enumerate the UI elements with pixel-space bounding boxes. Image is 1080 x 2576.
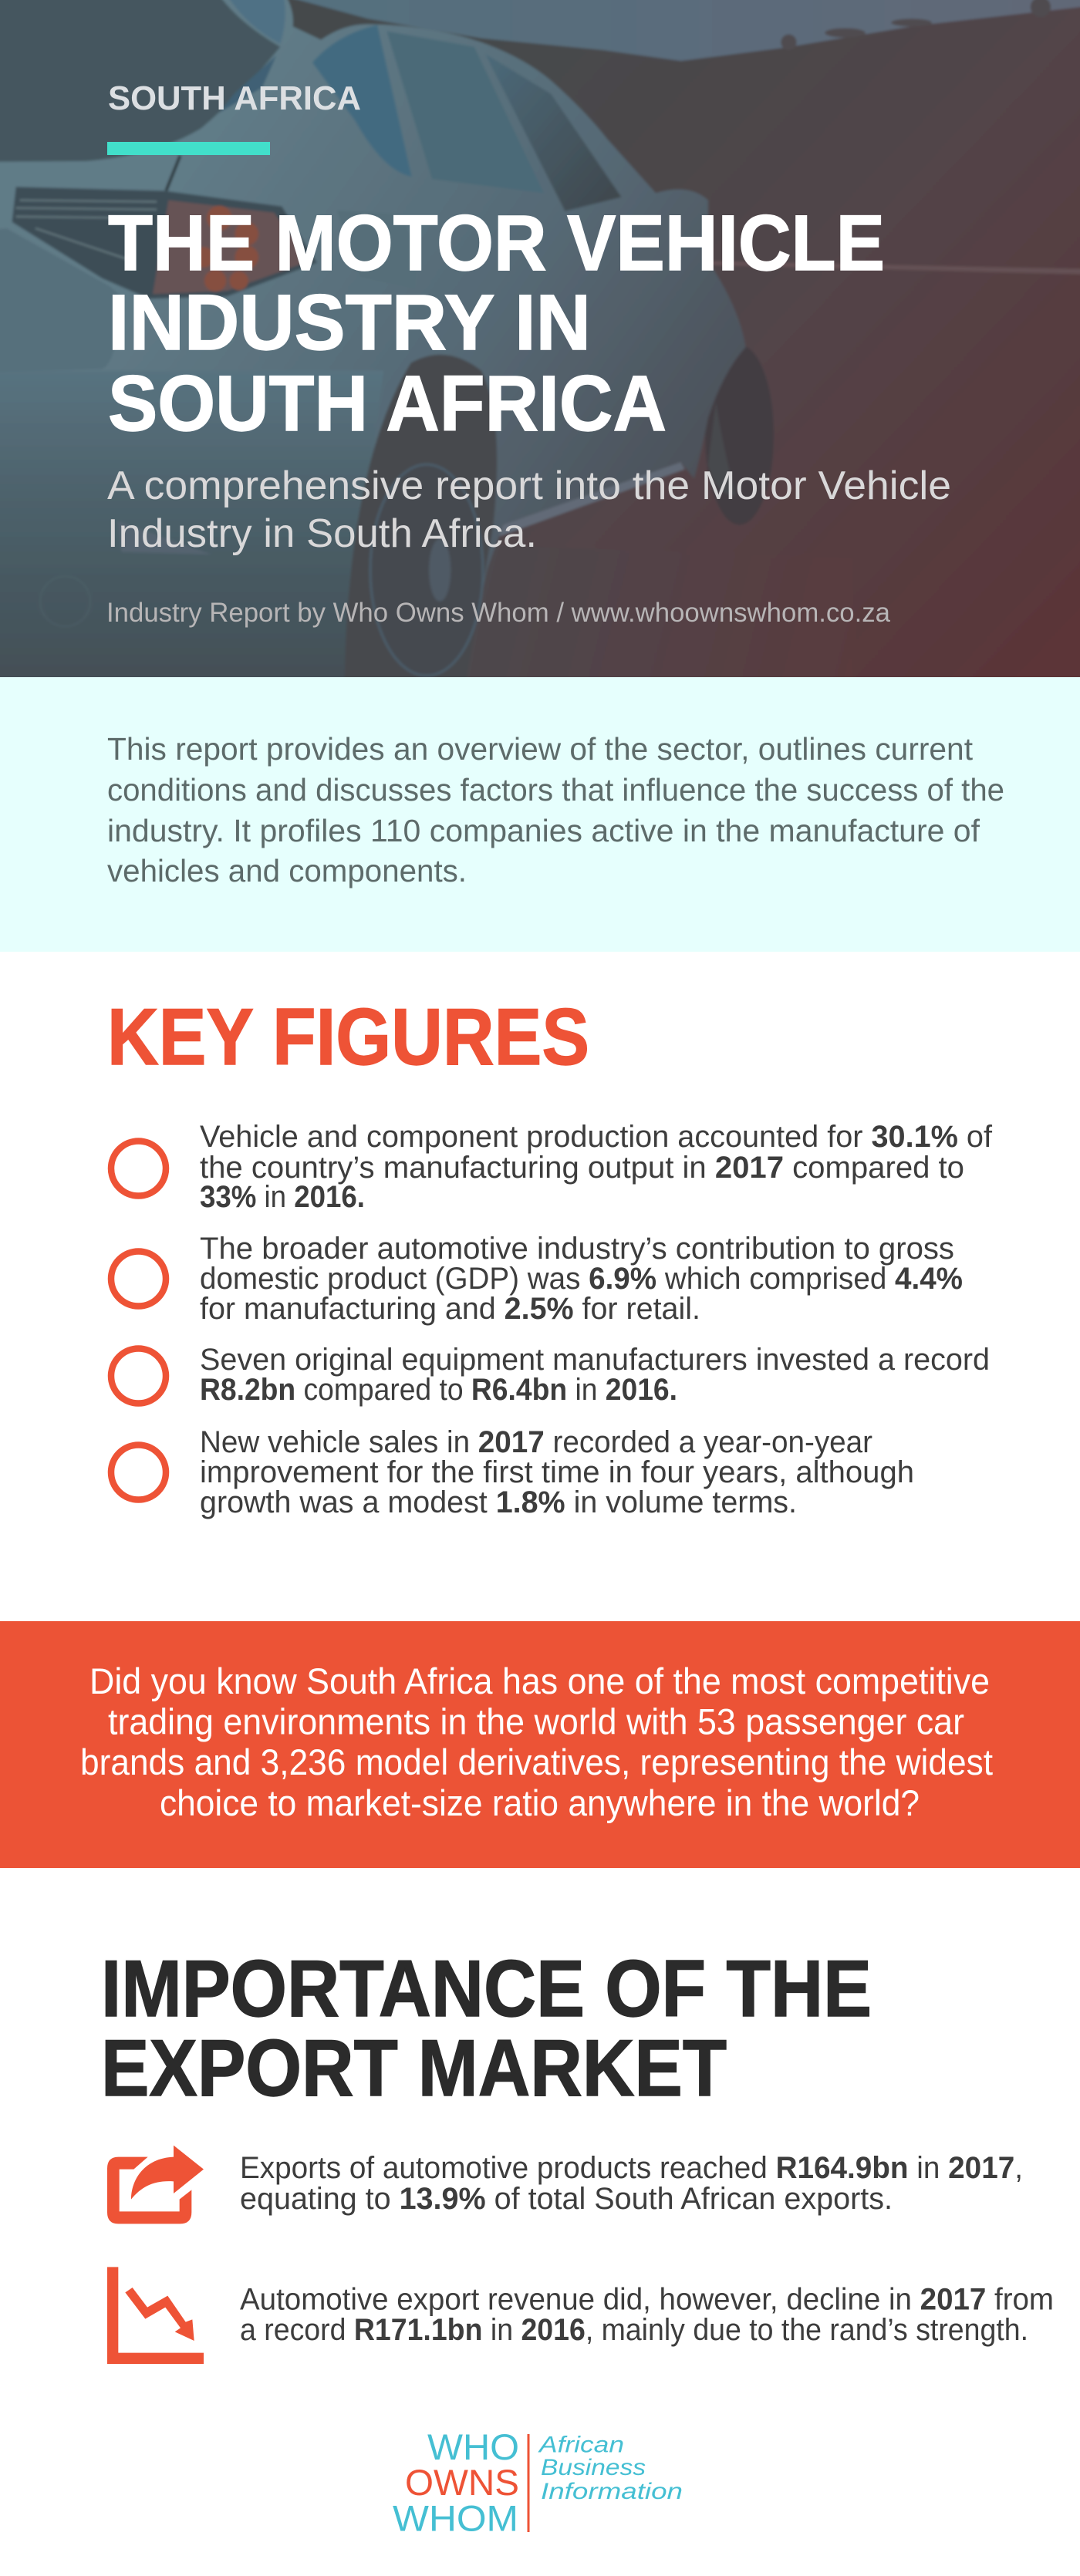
- figure text: for manufacturing and 2.5% for retail.: [200, 1292, 700, 1326]
- logo divider: [528, 2434, 529, 2532]
- logo tagline: Business: [541, 2455, 646, 2480]
- figure text: Vehicle and component production accounted for 30.1% of: [200, 1120, 993, 1154]
- figure text: New vehicle sales in 2017 recorded a year-on-year: [200, 1425, 872, 1459]
- figure text: [200, 1425, 914, 1519]
- callout: did you know: [0, 1621, 1080, 1868]
- figure text: R8.2bn compared to R6.4bn in 2016.: [200, 1373, 677, 1407]
- icon: share arrow: [107, 2146, 204, 2224]
- key figure 4: [111, 1425, 914, 1519]
- figure text: growth was a modest 1.8% in volume terms.: [200, 1485, 797, 1519]
- export text: a record R171.1bn in 2016, mainly due to the rand’s strength.: [240, 2313, 1028, 2347]
- export item 1: [107, 2146, 1023, 2224]
- callout text: [80, 1661, 993, 1823]
- title: SOUTH AFRICA: [108, 359, 667, 447]
- figure text: domestic product (GDP) was 6.9% which comprised 4.4%: [200, 1262, 963, 1296]
- figure text: The broader automotive industry’s contribution to gross: [200, 1232, 954, 1266]
- heading: importance of the export market: EXPORT MARKET: [101, 2024, 727, 2113]
- panel: key figures: [107, 993, 993, 1519]
- export text: Exports of automotive products reached R164.9bn in 2017,: [240, 2151, 1023, 2185]
- figure text: the country’s manufacturing output in 2017 compared to: [200, 1151, 964, 1185]
- export text: [240, 2151, 1023, 2216]
- logo wordmark: OWNS: [405, 2462, 519, 2503]
- icon: ring: [111, 1141, 166, 1195]
- hero panel: [0, 0, 1080, 682]
- title: THE MOTOR VEHICLE: [108, 199, 885, 287]
- subtitle: A comprehensive report into the Motor Vehicle: [107, 464, 951, 508]
- accent bar: [107, 142, 270, 155]
- figure text: improvement for the first time in four years, although: [200, 1455, 914, 1489]
- key figure 2: [111, 1232, 963, 1326]
- title: INDUSTRY IN: [108, 278, 591, 366]
- heading: importance of the export market: [101, 1944, 872, 2113]
- callout text: trading environments in the world with 53 passenger car: [108, 1701, 964, 1741]
- panel: export market: [101, 1944, 1054, 2364]
- callout text: brands and 3,236 model derivatives, representing the widest: [80, 1741, 993, 1782]
- figure text: 33% in 2016.: [200, 1180, 365, 1214]
- export text: equating to 13.9% of total South African exports.: [240, 2182, 893, 2216]
- icon: ring: [111, 1445, 166, 1499]
- intro text: industry. It profiles 110 companies active in the manufacture of: [107, 813, 980, 848]
- logo tagline: African: [538, 2433, 624, 2457]
- key figure 1: [111, 1120, 993, 1214]
- intro text: This report provides an overview of the sector, outlines current: [107, 731, 974, 767]
- intro text: conditions and discusses factors that influence the success of the: [107, 772, 1004, 808]
- figure text: Seven original equipment manufacturers invested a record: [200, 1343, 990, 1377]
- key figure 3: [111, 1343, 990, 1407]
- heading: importance of the export market: IMPORTANCE OF THE: [101, 1944, 872, 2034]
- export text: Automotive export revenue did, however, decline in 2017 from: [240, 2283, 1054, 2317]
- logo: Who Owns Whom: [393, 2426, 683, 2539]
- logo wordmark: [393, 2426, 519, 2539]
- intro text: [107, 731, 1004, 888]
- panel: introduction: [0, 677, 1080, 952]
- icon: ring: [111, 1251, 166, 1307]
- subtitle: [107, 464, 951, 556]
- report credit: Industry Report by Who Owns Whom / www.whoownswhom.co.za: [106, 598, 891, 628]
- export item 2: [107, 2267, 1054, 2364]
- hero background photo of a car: [0, 0, 1080, 682]
- figure text: [200, 1120, 993, 1214]
- logo tagline: Information: [541, 2479, 683, 2504]
- figure text: [200, 1232, 963, 1326]
- export text: [240, 2283, 1054, 2347]
- logo wordmark: WHO: [427, 2426, 519, 2467]
- logo wordmark: WHOM: [393, 2497, 518, 2539]
- kicker: South Africa: SOUTH AFRICA: [108, 79, 361, 117]
- heading: key figures: KEY FIGURES: [107, 993, 589, 1082]
- icon: declining chart: [107, 2267, 204, 2364]
- callout text: Did you know South Africa has one of the most competitive: [89, 1661, 990, 1701]
- logo tagline: [538, 2433, 683, 2504]
- intro text: vehicles and components.: [107, 853, 467, 888]
- callout text: choice to market-size ratio anywhere in the world?: [160, 1782, 920, 1823]
- icon: ring: [111, 1348, 166, 1404]
- figure text: [200, 1343, 990, 1407]
- subtitle: Industry in South Africa.: [107, 511, 537, 556]
- title: [108, 199, 885, 447]
